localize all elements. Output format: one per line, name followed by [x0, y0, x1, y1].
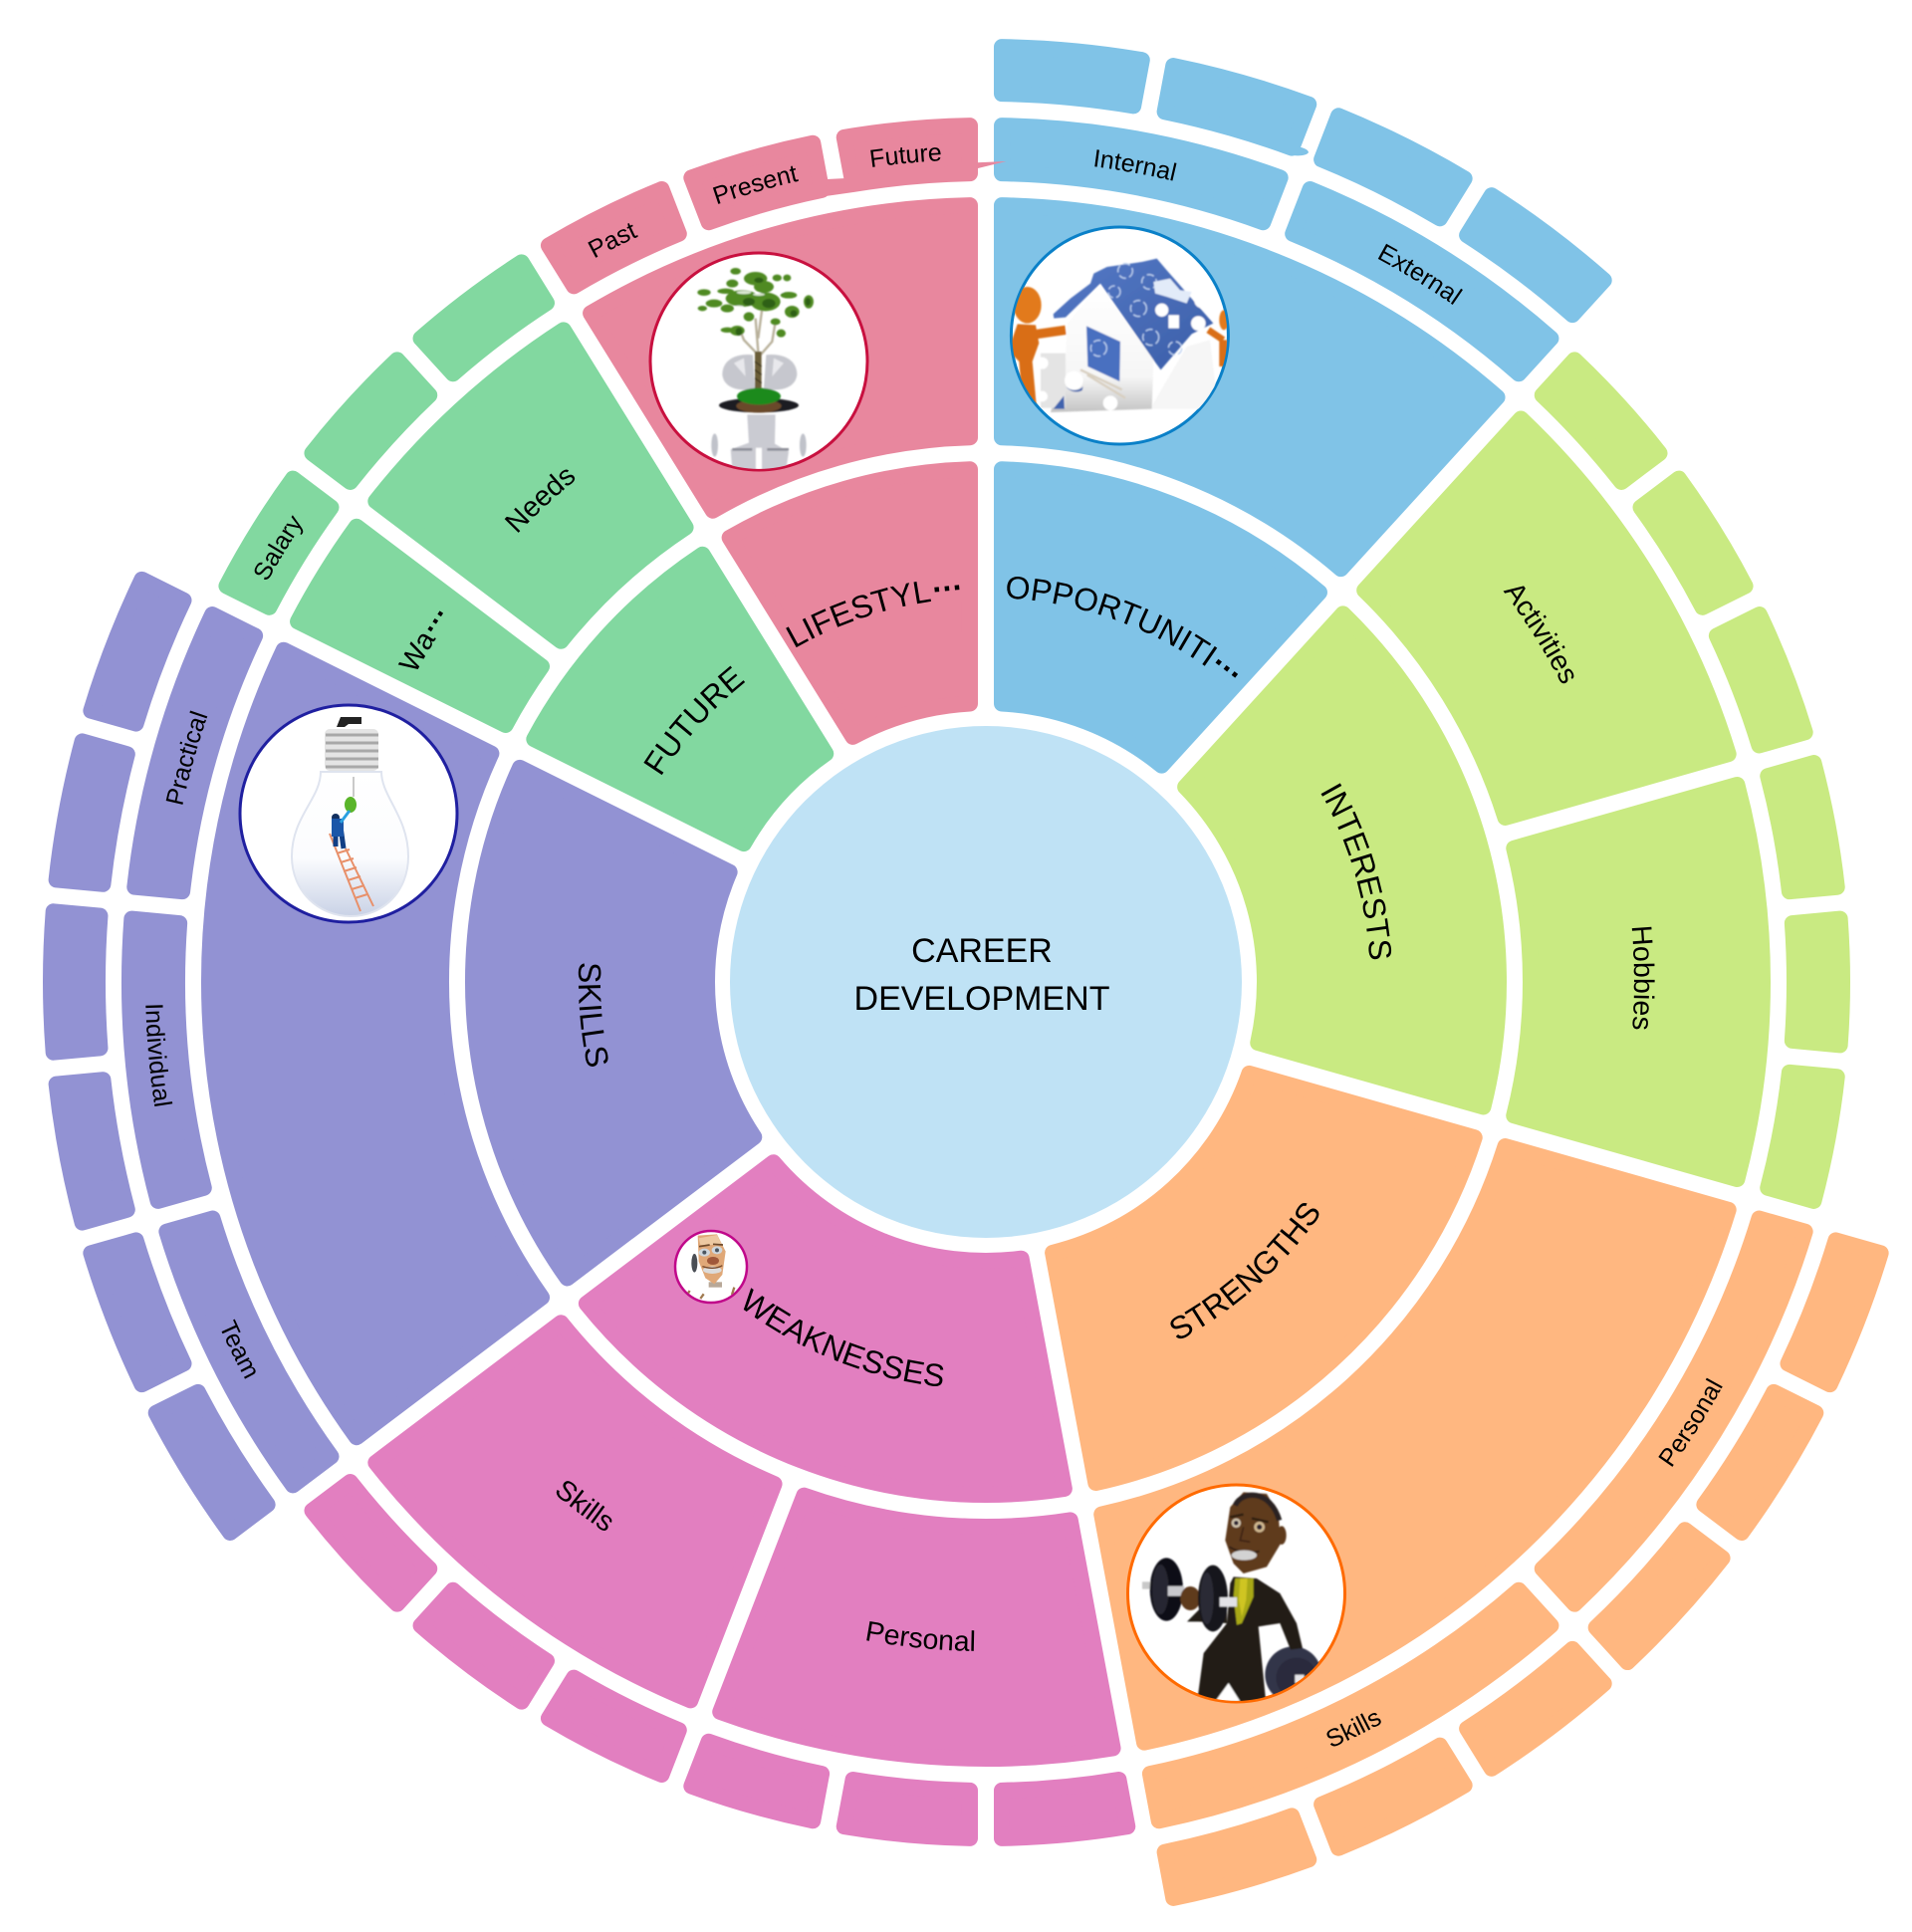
segment: Wants: Wa — [398, 633, 436, 669]
image: light bulb with ladder — [240, 705, 457, 922]
sector: Future — [218, 254, 835, 852]
segment: Personal — [1534, 1211, 1813, 1612]
leaf: interests 4 — [1767, 763, 1839, 896]
leaf: weaknesses 2 — [844, 1780, 974, 1840]
segment: Skills — [367, 1315, 783, 1709]
segment: lifestyle image ring — [584, 181, 1031, 528]
segment: INTERESTS: INTERESTS — [1320, 783, 1392, 960]
segment: Needs: Needs — [504, 470, 576, 533]
centre circle: Career Development: DEVELOPMENT — [854, 980, 1109, 1018]
segment: Skills: Skills — [1326, 1713, 1381, 1747]
leaf: interests 6 — [1767, 1068, 1839, 1201]
segment: LIFESTYLE — [721, 461, 978, 745]
segment: Personal: Personal — [866, 1621, 974, 1651]
sector: Lifestyle — [540, 118, 978, 745]
segment: External — [1285, 181, 1559, 382]
segment: LIFESTYLE: … — [934, 585, 960, 592]
artifact: blue blob on leaf corner — [1273, 142, 1309, 155]
leaf: future 2 — [311, 359, 432, 485]
segment: Needs — [367, 322, 694, 649]
leaf: interests 3 — [1715, 613, 1807, 750]
segment: Wants: … — [428, 610, 443, 631]
segment: External: External — [1378, 243, 1463, 305]
artifact: pink sliver crossing into Internal — [977, 161, 1006, 168]
segment: OPPORTUNITIES — [994, 461, 1327, 774]
sector: Weaknesses — [271, 1101, 1170, 1846]
segment: STRENGTHS: STRENGTHS — [1170, 1203, 1318, 1338]
segment: Practical — [126, 606, 263, 900]
leaf: strengths 2 — [1702, 1388, 1818, 1534]
leaf: opportunities 3 — [1317, 114, 1466, 220]
leaf: strengths 5 — [1317, 1744, 1466, 1850]
sector: Interests — [1177, 352, 1850, 1209]
segment: Internal: Internal — [1094, 149, 1177, 181]
segment: Future — [836, 118, 978, 192]
leaf: strengths 4 — [1464, 1646, 1605, 1771]
sector: Strengths — [1045, 1066, 1889, 1906]
segment: strengths image ring — [1012, 1064, 1801, 1822]
segment: Hobbies — [1506, 777, 1771, 1187]
segment: Team: Team — [221, 1319, 256, 1379]
leaf: skills 2 — [89, 1236, 185, 1385]
leaf: skills 4 — [51, 911, 100, 1053]
image: cartoon head with headset — [675, 1231, 747, 1303]
leaf: strengths 1 — [1787, 1236, 1883, 1385]
leaf: strengths 6 — [1160, 1814, 1310, 1900]
leaf: skills 6 — [89, 579, 185, 728]
segment: FUTURE — [526, 546, 835, 852]
leaf: interests 5 — [1792, 919, 1842, 1045]
leaf: skills 5 — [54, 741, 128, 888]
leaf: opportunities 1 — [998, 44, 1142, 107]
segment: Present: Present — [713, 165, 799, 204]
segment: Hobbies: Hobbies — [1631, 926, 1655, 1030]
segment: Team — [158, 1211, 339, 1494]
segment: INTERESTS — [1177, 605, 1507, 1115]
segment: Personal: Personal — [1658, 1378, 1723, 1467]
image: tree on chair — [650, 253, 867, 470]
leaf: future 3 — [419, 260, 551, 376]
segment: Individual: Individual — [145, 1005, 173, 1106]
segment: Personal — [712, 1488, 1121, 1767]
leaf: weaknesses 4 — [548, 1676, 683, 1777]
centre circle: Career Development — [730, 726, 1242, 1238]
sector: Skills — [43, 572, 763, 1541]
segment: OPPORTUNITIES: … — [1215, 659, 1239, 678]
segment: FUTURE: FUTURE — [643, 665, 745, 775]
segment: Past: Past — [588, 223, 638, 258]
segment: Activities — [1356, 410, 1737, 826]
leaf: skills 1 — [153, 1388, 270, 1534]
leaf: interests 1 — [1540, 359, 1661, 485]
leaf: weaknesses 3 — [691, 1741, 826, 1823]
sector: Opportunities — [994, 39, 1612, 774]
image: house and figures — [1011, 227, 1229, 444]
segment: skills image ring — [176, 631, 553, 1447]
segment: Individual — [121, 910, 212, 1209]
segment: Practical: Practical — [165, 711, 207, 805]
artifact: pink join between Present and Future — [826, 178, 853, 196]
leaf: opportunities 2 — [1160, 64, 1310, 149]
segment: SKILLS — [465, 759, 763, 1287]
segment: SKILLS: SKILLS — [578, 963, 608, 1067]
segment: Past — [540, 181, 687, 295]
segment: Skills: Skills — [556, 1481, 611, 1531]
segment: Future: Future — [870, 147, 941, 167]
segment: Activities: Activities — [1504, 586, 1573, 683]
segment: WEAKNESSES: WEAKNESSES — [743, 1288, 944, 1386]
segment: Present — [683, 135, 829, 231]
leaf: opportunities 4 — [1464, 193, 1605, 318]
leaf: weaknesses 5 — [419, 1587, 551, 1704]
segment: LIFESTYLE: LIFESTYL — [786, 582, 931, 647]
segment: Internal — [994, 118, 1289, 231]
leaf: weaknesses 1 — [998, 1780, 1127, 1840]
leaf: strengths 3 — [1593, 1527, 1725, 1664]
leaf: skills 3 — [54, 1076, 128, 1223]
segment: Skills — [1141, 1581, 1559, 1828]
centre circle: Career Development: CAREER — [911, 932, 1053, 970]
segment: STRENGTHS — [1045, 1066, 1483, 1491]
segment: OPPORTUNITIES: OPPORTUNITI — [1007, 577, 1217, 666]
segment: WEAKNESSES — [578, 1154, 1073, 1503]
image: businessman with dumbbells — [1127, 1485, 1344, 1703]
segment: Salary: Salary — [255, 515, 303, 580]
leaf: interests 2 — [1638, 477, 1748, 611]
segment: Salary — [218, 470, 339, 615]
leaf: weaknesses 6 — [311, 1479, 432, 1605]
segment: Wants — [290, 518, 550, 733]
segment: opportunities image ring — [923, 161, 1515, 600]
